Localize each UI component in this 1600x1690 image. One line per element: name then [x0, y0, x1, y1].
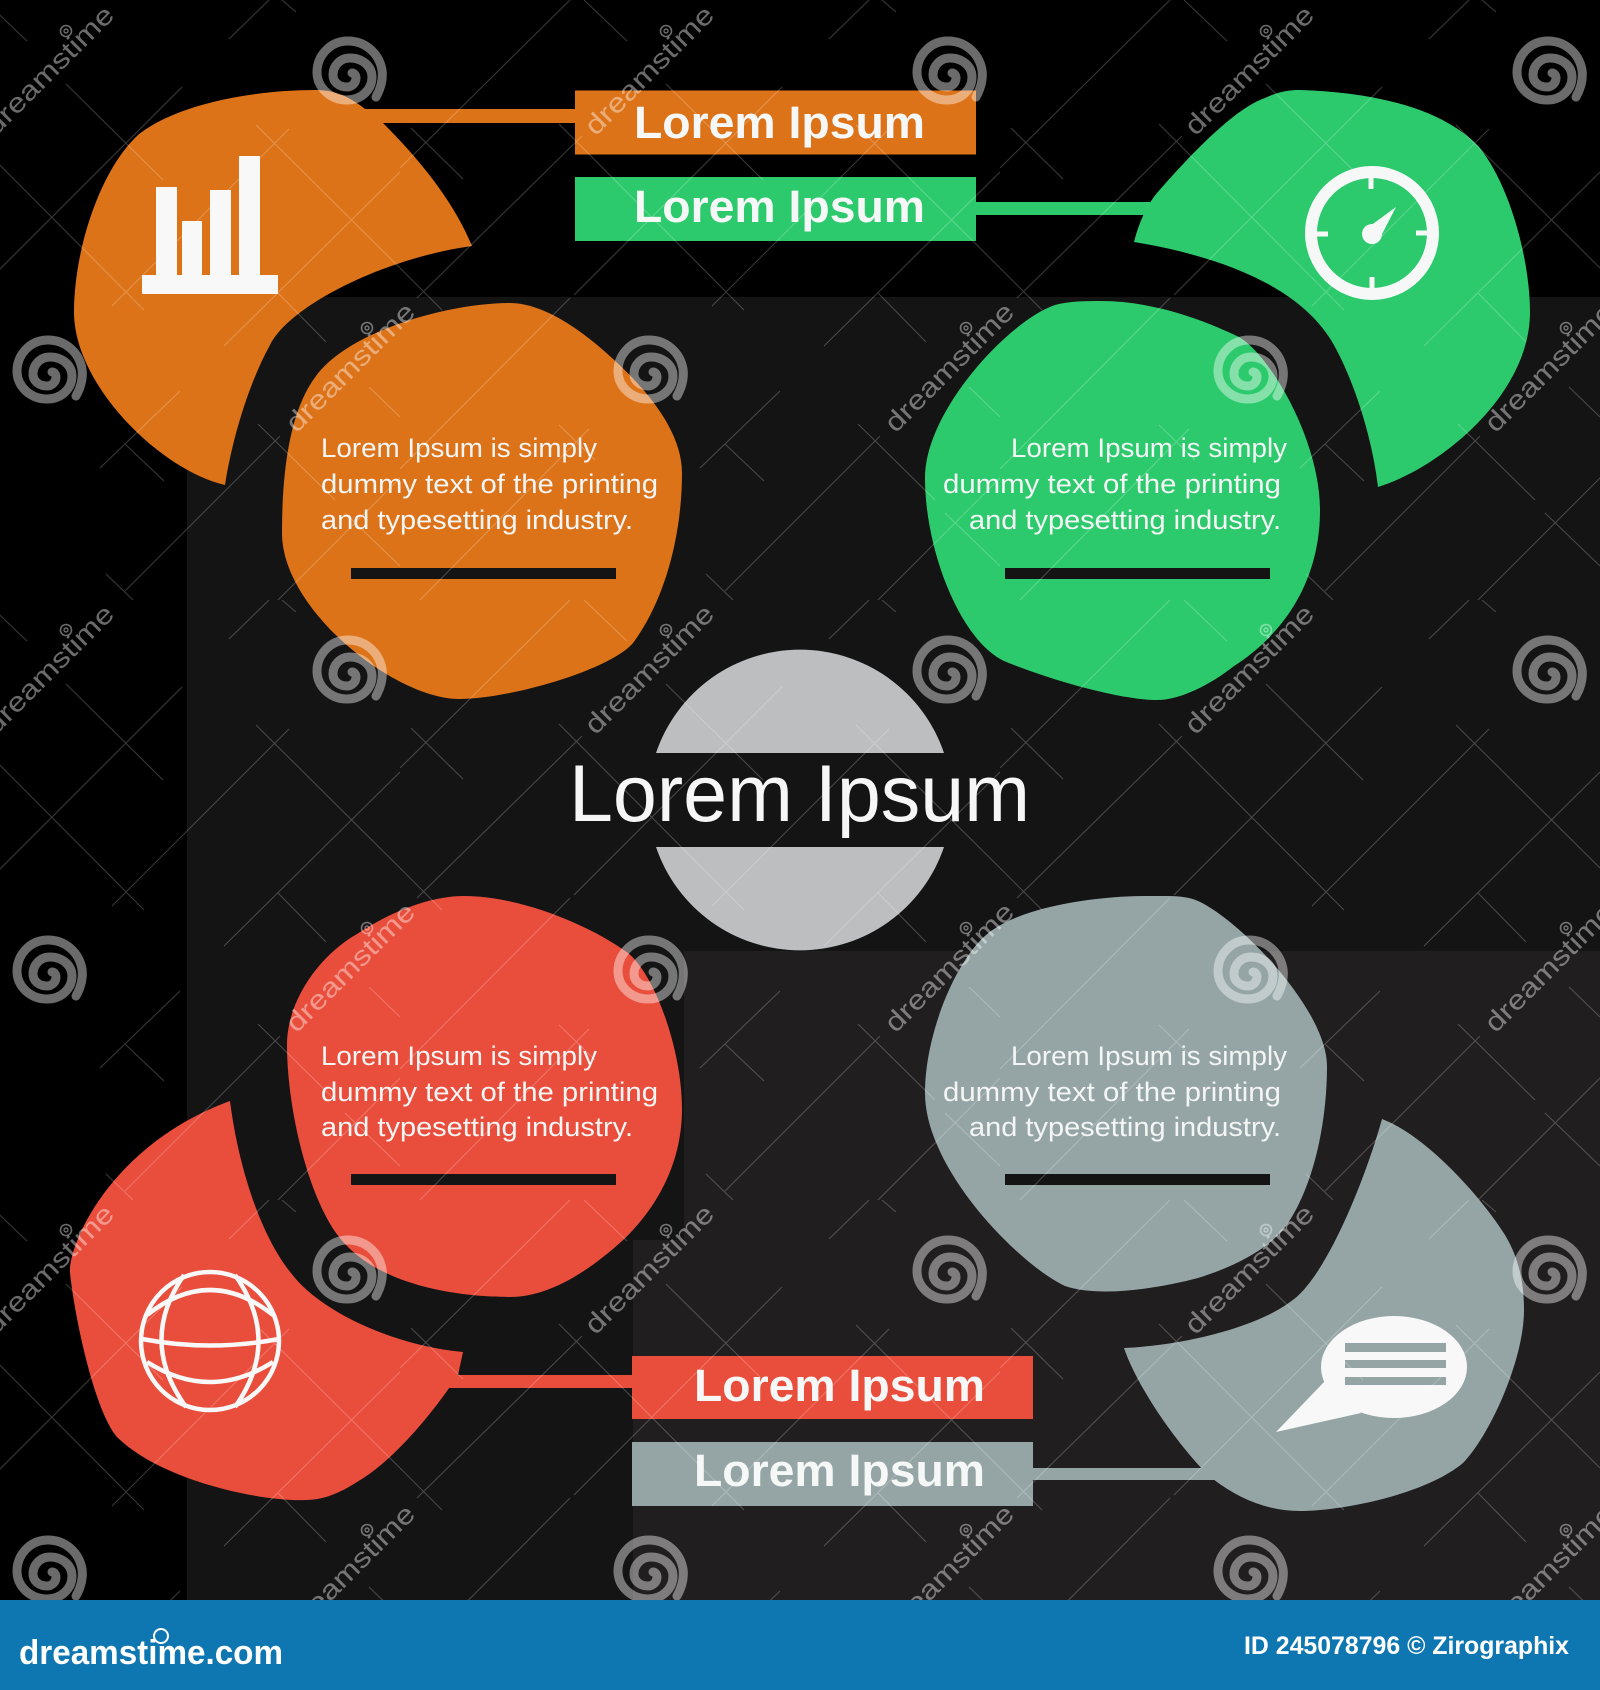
panel: center circle title: [569, 650, 1030, 950]
watermark overlay: dreamstime: [579, 1199, 720, 1340]
watermark overlay: dreamstime: [579, 0, 720, 141]
orange text bubble: and typesetting industry.: [321, 505, 633, 535]
watermark overlay: dreamstime: [1479, 897, 1600, 1038]
icon: speech bubble: [1276, 1316, 1467, 1432]
watermark overlay: dreamstime: [1179, 0, 1320, 141]
watermark overlay: dreamstime: [879, 1499, 1020, 1640]
green petal with gauge icon: [1134, 90, 1530, 487]
red petal with globe icon: [70, 1101, 463, 1500]
red text bubble: Lorem Ipsum is simply: [321, 1041, 597, 1071]
watermark overlay: dreamstime: [879, 297, 1020, 438]
footer credit: ID 245078796 © Zirographix: [1244, 1632, 1569, 1660]
red text bubble: dummy text of the printing: [321, 1077, 658, 1107]
orange connector: [365, 109, 575, 123]
panel: gray bottom right: [632, 896, 1524, 1511]
red text bubble: [287, 896, 682, 1297]
footer bar: [0, 1600, 1600, 1690]
panel: green top right: [575, 90, 1530, 700]
watermark overlay: dreamstime: [280, 897, 421, 1038]
green text bubble: [925, 301, 1320, 700]
gray text bubble: Lorem Ipsum is simply: [1011, 1041, 1287, 1071]
orange petal with chart icon: [74, 90, 472, 485]
watermark overlay: dreamstime: [1179, 1199, 1320, 1340]
gray text bubble: dummy text of the printing: [943, 1077, 1281, 1107]
red label: Lorem Ipsum: [694, 1360, 985, 1411]
footer logo: dreamstime.com: [19, 1634, 283, 1672]
red connector: [449, 1375, 633, 1388]
green text bubble: and typesetting industry.: [969, 505, 1281, 535]
panel: orange top left: [74, 90, 976, 699]
gray label: [632, 1442, 1033, 1506]
icon: gauge: [1311, 172, 1433, 294]
orange label: [575, 90, 976, 154]
green connector: [976, 202, 1151, 215]
watermark overlay: dreamstime: [1179, 599, 1320, 740]
icon: globe: [141, 1272, 279, 1410]
title: Lorem Ipsum: [569, 749, 1030, 839]
orange text bubble: Lorem Ipsum is simply: [321, 433, 597, 463]
orange text bubble: [282, 303, 682, 699]
red text bubble: and typesetting industry.: [321, 1112, 633, 1142]
watermark overlay: dreamstime: [280, 297, 421, 438]
gray text bubble: and typesetting industry.: [969, 1112, 1281, 1142]
watermark overlay: dreamstime: [579, 599, 720, 740]
watermark overlay: dreamstime: [1479, 297, 1600, 438]
panel: red bottom left: [70, 896, 1033, 1500]
green text bubble: Lorem Ipsum is simply: [1011, 433, 1287, 463]
icon: bar chart: [142, 156, 278, 294]
gray connector: [1033, 1468, 1217, 1480]
green text bubble: dummy text of the printing: [943, 469, 1281, 499]
watermark overlay: dreamstime: [280, 1499, 421, 1640]
green label: Lorem Ipsum: [634, 181, 925, 232]
watermark overlay: dreamstime: [1479, 1499, 1600, 1640]
orange text bubble: dummy text of the printing: [321, 469, 658, 499]
gray text bubble: [925, 896, 1327, 1291]
watermark overlay: dreamstime: [879, 897, 1020, 1038]
gray petal with speech icon: [1124, 1119, 1524, 1511]
orange label: Lorem Ipsum: [634, 97, 925, 148]
gray label: Lorem Ipsum: [694, 1445, 985, 1496]
red label: [632, 1356, 1033, 1419]
green label: [575, 177, 976, 241]
